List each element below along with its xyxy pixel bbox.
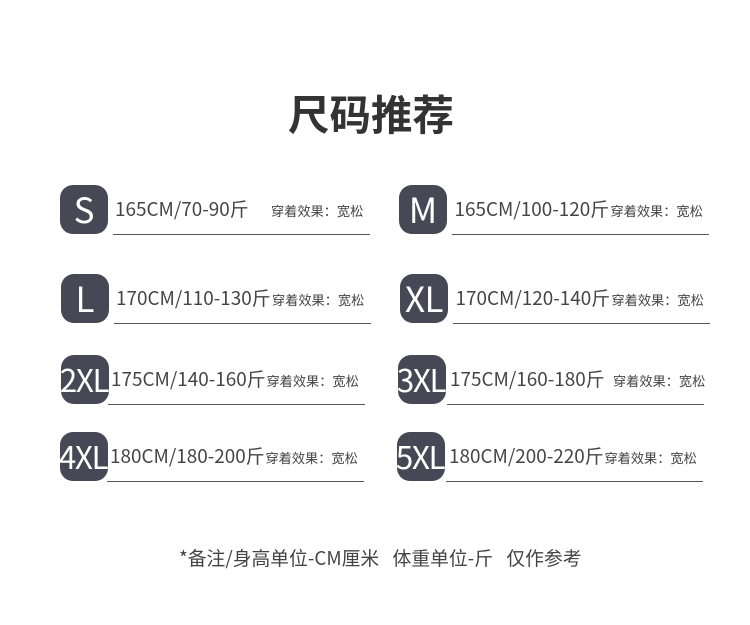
fit: 5XL: 穿着效果：宽松 [604,448,697,467]
rule: S [113,234,370,235]
size row: M [399,183,709,235]
rule: XL [453,323,710,324]
badge: XL: XL [405,272,443,323]
size row: L [61,272,371,324]
rule: 5XL [446,481,703,482]
size row: 3XL [397,355,705,405]
title: 尺码推荐 [288,82,454,142]
badge: S [60,185,108,234]
badge: S: S [74,183,94,234]
spec: XL: 170CM/120-140斤 [456,284,610,311]
rule: 3XL [447,404,704,405]
badge: 2XL: 2XL [60,356,108,402]
fit: XL: 穿着效果：宽松 [612,290,704,309]
fit: S: 穿着效果：宽松 [271,201,363,220]
badge: L [61,274,109,323]
spec: 2XL: 175CM/140-160斤 [111,365,266,392]
badge: M [399,185,447,234]
badge: 3XL: 3XL [397,356,445,402]
spec: M: 165CM/100-120斤 [454,195,609,222]
spec: S: 165CM/70-90斤 [115,195,249,222]
badge: L: L [75,272,94,323]
badge: 5XL: 5XL [396,433,444,479]
badge: M: M [409,183,437,234]
fit: M: 穿着效果：宽松 [610,201,703,220]
spec: 3XL: 175CM/160-180斤 [450,365,605,392]
size row: XL [400,272,710,324]
rule: 4XL [107,481,364,482]
spec: 5XL: 180CM/200-220斤 [449,442,604,469]
footnote: *备注/身高单位-CM厘米 体重单位-斤 仅作参考 [179,544,582,571]
rule: L [114,323,371,324]
badge: 4XL: 4XL [59,433,107,479]
spec: L: 170CM/110-130斤 [116,284,271,311]
size row: S [60,183,370,235]
rule: M [452,234,709,235]
fit: L: 穿着效果：宽松 [272,290,364,309]
size row: 4XL [59,432,364,482]
rule: 2XL [108,404,365,405]
size row: 5XL [396,432,703,482]
fit: 2XL: 穿着效果：宽松 [266,371,359,390]
fit: 3XL: 穿着效果：宽松 [613,371,705,390]
fit: 4XL: 穿着效果：宽松 [266,448,358,467]
size row: 2XL [60,355,365,405]
spec: 4XL: 180CM/180-200斤 [110,442,265,469]
